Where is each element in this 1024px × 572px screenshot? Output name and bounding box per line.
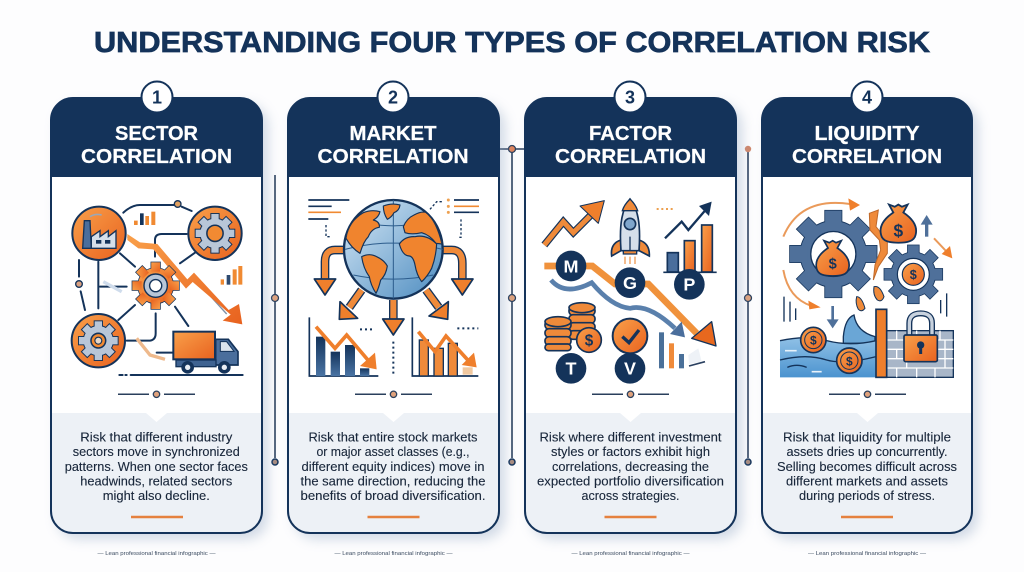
description	[537, 430, 724, 503]
description: or major asset classes (e.g.,	[316, 444, 470, 459]
description: Risk that liquidity for multiple	[783, 430, 951, 444]
connector: between cards 2 and 3	[499, 146, 525, 465]
icon: liquidity gears and lock: $	[829, 257, 837, 273]
panel: sector correlation	[51, 82, 268, 539]
description	[65, 430, 248, 503]
description: during periods of stress.	[799, 488, 935, 503]
heading: LIQUIDITY	[814, 122, 920, 145]
description: the same direction, reducing the	[300, 474, 486, 488]
description	[777, 430, 957, 503]
divider	[355, 391, 432, 397]
description: styles or factors exhibit high	[551, 444, 710, 459]
heading: MARKET	[350, 122, 437, 145]
number badge 4	[852, 82, 882, 112]
footer note 1: — Lean professional financial infographic —	[98, 551, 216, 557]
description: assets dries up concurrently.	[786, 444, 948, 459]
description: expected portfolio diversification	[537, 474, 724, 488]
divider	[592, 391, 669, 397]
icon: liquidity gears and lock: $	[846, 354, 853, 368]
icon: liquidity gears and lock: $	[810, 334, 817, 348]
heading	[792, 122, 942, 168]
heading: SECTOR	[115, 122, 198, 145]
connector: between cards 3 and 4	[744, 146, 752, 465]
heading	[81, 122, 232, 168]
description: across strategies.	[582, 488, 680, 503]
number badge 4: 4	[862, 88, 872, 108]
description: Risk that entire stock markets	[308, 430, 478, 444]
number badge 3: 3	[625, 88, 635, 108]
footer note 4: — Lean professional financial infographic —	[808, 551, 927, 557]
icon: liquidity gears and lock	[780, 198, 953, 377]
icon: factor styles: G	[623, 273, 637, 293]
description: Risk that different industry	[80, 430, 233, 444]
icon: liquidity gears and lock: $	[894, 220, 904, 240]
description: headwinds, related sectors	[80, 474, 233, 488]
connector: between cards 1 and 2	[272, 175, 278, 465]
description: correlations, decreasing the	[552, 459, 709, 474]
heading: CORRELATION	[81, 145, 232, 168]
description: patterns. When one sector faces	[65, 459, 248, 474]
description: different markets and assets	[786, 474, 948, 488]
heading: CORRELATION	[792, 145, 942, 168]
number badge 2: 2	[388, 88, 398, 108]
icon: factor styles: M	[564, 256, 578, 276]
icon: factor styles: $	[585, 333, 594, 350]
icon: sector network	[72, 201, 243, 375]
icon: factor styles: P	[683, 275, 695, 295]
icon: factor styles: V	[624, 359, 636, 379]
icon: globe with falling charts	[308, 200, 479, 376]
description: might also decline.	[103, 488, 210, 503]
description: different equity indices) move in	[302, 459, 484, 474]
heading	[318, 122, 468, 168]
number badge 2	[378, 82, 408, 112]
title: UNDERSTANDING FOUR TYPES OF CORRELATION RISK	[94, 27, 930, 59]
heading: CORRELATION	[318, 145, 468, 168]
icon: liquidity gears and lock: $	[910, 268, 917, 282]
heading: FACTOR	[589, 122, 672, 145]
panel: market correlation	[288, 82, 505, 539]
description: benefits of broad diversification.	[300, 488, 486, 503]
icon: factor styles: T	[565, 359, 576, 379]
footer note 3: — Lean professional financial infographic —	[572, 551, 690, 557]
panel: liquidity correlation	[762, 82, 978, 539]
description: sectors move in synchronized	[73, 444, 240, 459]
footer note 2: — Lean professional financial infographic —	[334, 551, 453, 557]
divider	[118, 391, 195, 397]
number badge 1: 1	[152, 88, 162, 108]
heading	[555, 122, 706, 168]
description: Selling becomes difficult across	[777, 459, 957, 474]
panel: factor correlation	[525, 82, 742, 539]
description	[300, 430, 486, 503]
icon: factor styles	[544, 199, 717, 384]
number badge 3	[614, 82, 646, 112]
heading: CORRELATION	[555, 145, 706, 168]
number badge 1	[142, 82, 172, 112]
description: Risk where different investment	[540, 430, 722, 444]
divider	[829, 391, 906, 397]
